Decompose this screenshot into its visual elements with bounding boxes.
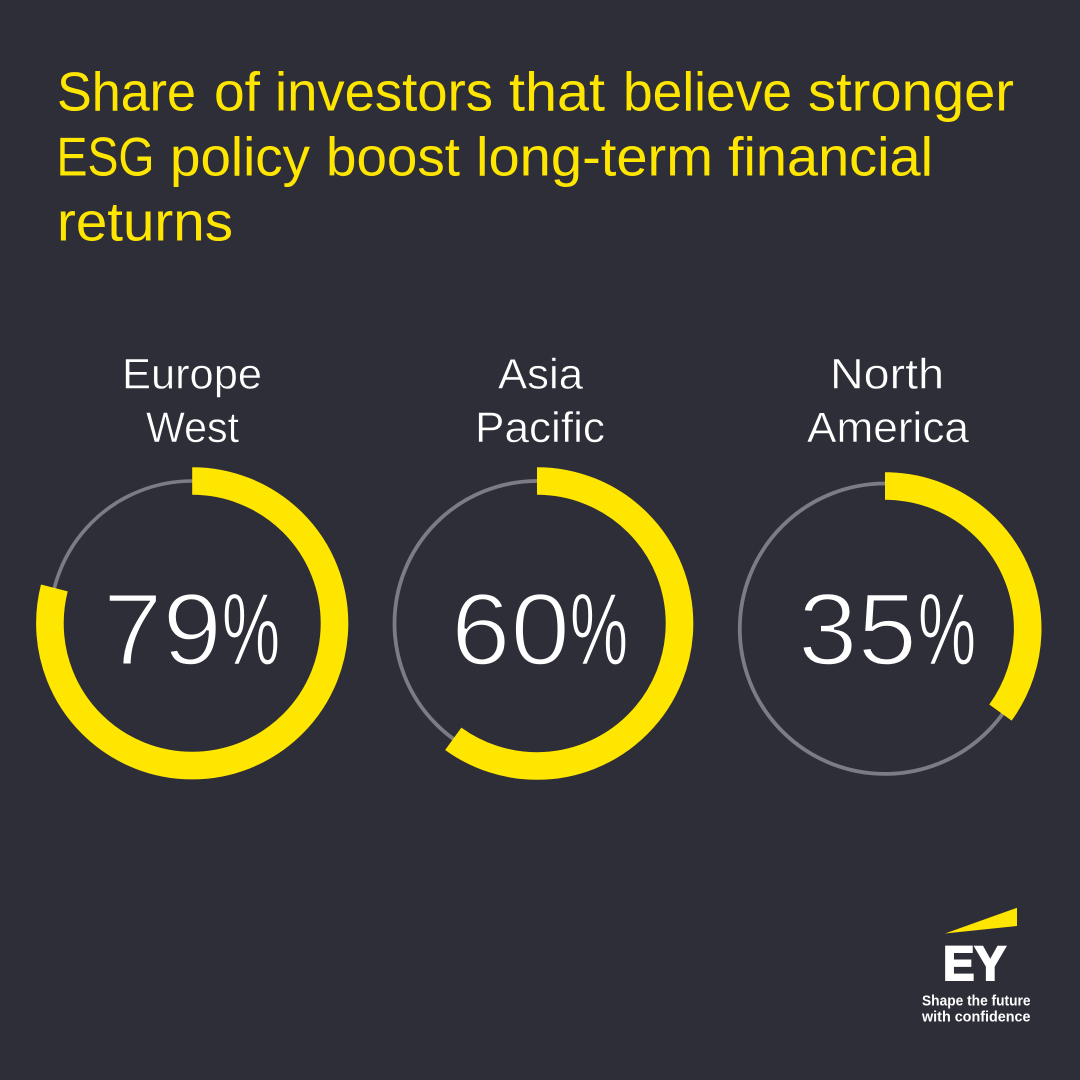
title: policy [170, 126, 310, 188]
value: 79%: 79 [103, 572, 222, 686]
title: Share [57, 60, 196, 122]
value: 60% [451, 572, 628, 687]
label: North America: North [830, 350, 944, 398]
title [56, 60, 1014, 252]
icon: yellow beam [945, 908, 1017, 934]
tagline: Shape the future [922, 994, 1030, 1010]
label: Europe West [122, 350, 262, 452]
panel: Asia Pacific [394, 350, 680, 766]
title: investors [275, 60, 493, 122]
label: North America: America [807, 404, 969, 452]
label: Europe West: West [146, 404, 239, 452]
title: that [509, 60, 605, 122]
title: of [214, 60, 261, 122]
EY logo [921, 908, 1030, 1026]
label: Asia Pacific: Asia [498, 350, 583, 398]
value: 35%: 35 [798, 572, 917, 686]
donut chart: 79% [50, 481, 334, 766]
logo wordmark: EY [943, 938, 1006, 991]
title: believe [623, 60, 792, 122]
title: stronger [808, 60, 1014, 122]
title: financial [728, 126, 933, 188]
value: 60%: % [570, 573, 628, 687]
tagline: with confidence [921, 1010, 1030, 1026]
donut chart: 35% [740, 484, 1030, 774]
tagline [921, 994, 1030, 1026]
panel: Europe West [50, 350, 334, 766]
value: 79%: % [222, 573, 280, 687]
donut chart: 60% [394, 481, 680, 766]
panel: North America [740, 350, 1030, 774]
value: 79% [103, 572, 280, 687]
title: boost [326, 126, 460, 188]
label: Europe West: Europe [122, 350, 262, 398]
title: long-term [476, 126, 713, 188]
label: North America [807, 350, 969, 452]
label: Asia Pacific: Pacific [475, 404, 605, 452]
label: Asia Pacific [475, 350, 605, 452]
value: 35%: % [918, 573, 976, 687]
value: 60%: 60 [451, 572, 570, 686]
title: returns [57, 190, 233, 252]
value: 35% [798, 572, 976, 687]
title: ESG [56, 126, 154, 188]
